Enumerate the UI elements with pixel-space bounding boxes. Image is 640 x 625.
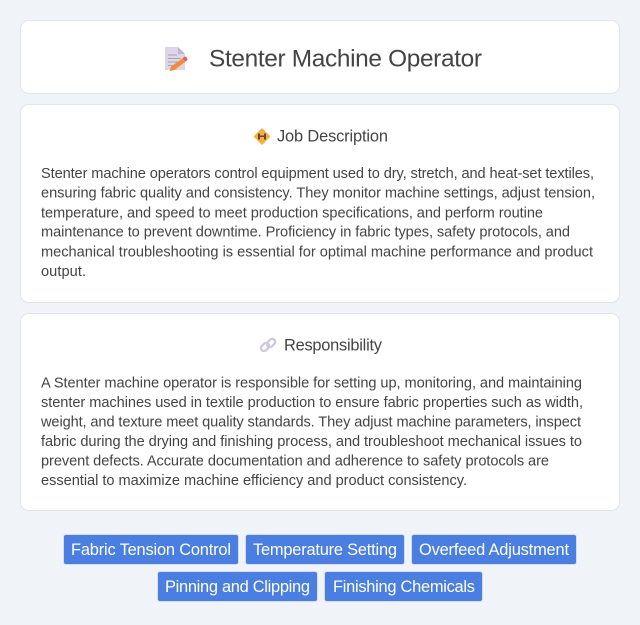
tag: temperature setting: Temperature Setting <box>253 541 397 559</box>
panel: responsibility <box>20 314 620 510</box>
text block: job description: ensuring fabric quality and consistency. They monitor machine settings, adjust tension, <box>41 186 595 202</box>
tags: skills <box>64 534 576 602</box>
tag: pinning and clipping <box>158 572 318 602</box>
text block: responsibility: prevent defects. Accurate documentation and adherence to safety protocols are <box>41 454 549 470</box>
text block: responsibility: fabric during the drying and finishing process, and troubleshoot mechanical issues to <box>41 434 582 450</box>
tag: overfeed adjustment <box>412 534 576 564</box>
text block: job description: Stenter machine operators control equipment used to dry, stretch, and heat-set textiles, <box>41 166 594 182</box>
heading: responsibility: Responsibility <box>284 336 383 354</box>
tag: overfeed adjustment: Overfeed Adjustment <box>419 541 569 559</box>
text block: job description: temperature, and speed to meet production specifications, and perform routine <box>41 206 543 222</box>
text block: job description: mechanical troubleshooting is essential for optimal machine performance and product <box>41 244 593 260</box>
panel: title header <box>20 20 620 94</box>
title: Stenter Machine Operator <box>209 46 482 72</box>
text block: responsibility <box>40 376 583 489</box>
icon: chain link <box>260 338 276 352</box>
text block: responsibility: stenter machines used in textile production to ensure fabric properties such as width, <box>41 395 583 411</box>
panel: job description <box>20 104 620 302</box>
text block: job description <box>41 166 595 280</box>
text block: responsibility: A Stenter machine operator is responsible for setting up, monitoring, and maintaining <box>41 376 582 392</box>
tag: finishing chemicals <box>324 572 482 602</box>
icon: document with pencil <box>165 47 188 71</box>
tag: fabric tension control <box>64 534 238 564</box>
tag: fabric tension control: Fabric Tension Control <box>71 541 231 559</box>
heading: job description: Job Description <box>277 128 388 146</box>
tag: finishing chemicals: Finishing Chemicals <box>333 578 475 596</box>
text block: job description: output. <box>41 264 86 280</box>
text block: responsibility: essential to maximize machine efficiency and product consistency. <box>41 473 467 489</box>
tag: temperature setting <box>246 534 404 564</box>
text block: responsibility: weight, and texture meet quality standards. They adjust machine parameters, inspect <box>40 414 581 430</box>
tag: pinning and clipping: Pinning and Clipping <box>165 578 310 596</box>
icon: diamond road sign <box>254 128 270 145</box>
text block: job description: maintenance to prevent downtime. Proficiency in fabric types, safety protocols, and <box>41 224 570 240</box>
